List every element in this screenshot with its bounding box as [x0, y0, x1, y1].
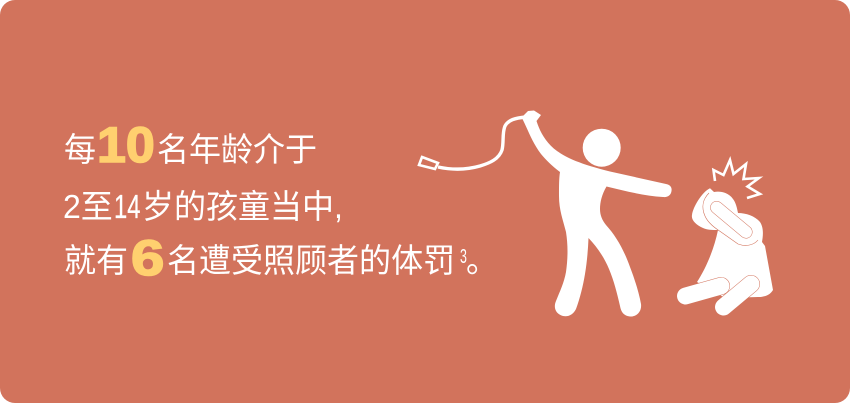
right leg — [724, 284, 751, 307]
text: line 2 end: 岁的孩童当中, — [142, 188, 342, 225]
text: line 1 start: 每 — [64, 131, 96, 168]
number: 6 highlighted: 6 — [131, 230, 164, 286]
number: 10 highlighted: 10 — [97, 117, 155, 173]
text: full stop: 。 — [466, 242, 498, 279]
text: line 1 end: 名年龄介于 — [156, 131, 317, 168]
sleeve outline — [703, 193, 758, 245]
text: line 3 end: 名遭受照顾者的体罚 — [166, 242, 455, 279]
forearm covering head — [717, 208, 746, 232]
impact star — [714, 160, 760, 198]
left leg — [686, 286, 721, 296]
body and head silhouette — [692, 188, 773, 298]
text: footnote mark: 3 — [460, 246, 466, 268]
text: line 3 start: 就有 — [64, 242, 128, 279]
text: line 2 number: 14 — [114, 188, 140, 225]
text block: statistic sentence — [63, 117, 498, 286]
text: line 2 start: 2至 — [63, 188, 113, 225]
icon: crouching child — [686, 160, 773, 307]
icon: whip — [419, 117, 526, 169]
icon: adult figure — [521, 110, 672, 317]
